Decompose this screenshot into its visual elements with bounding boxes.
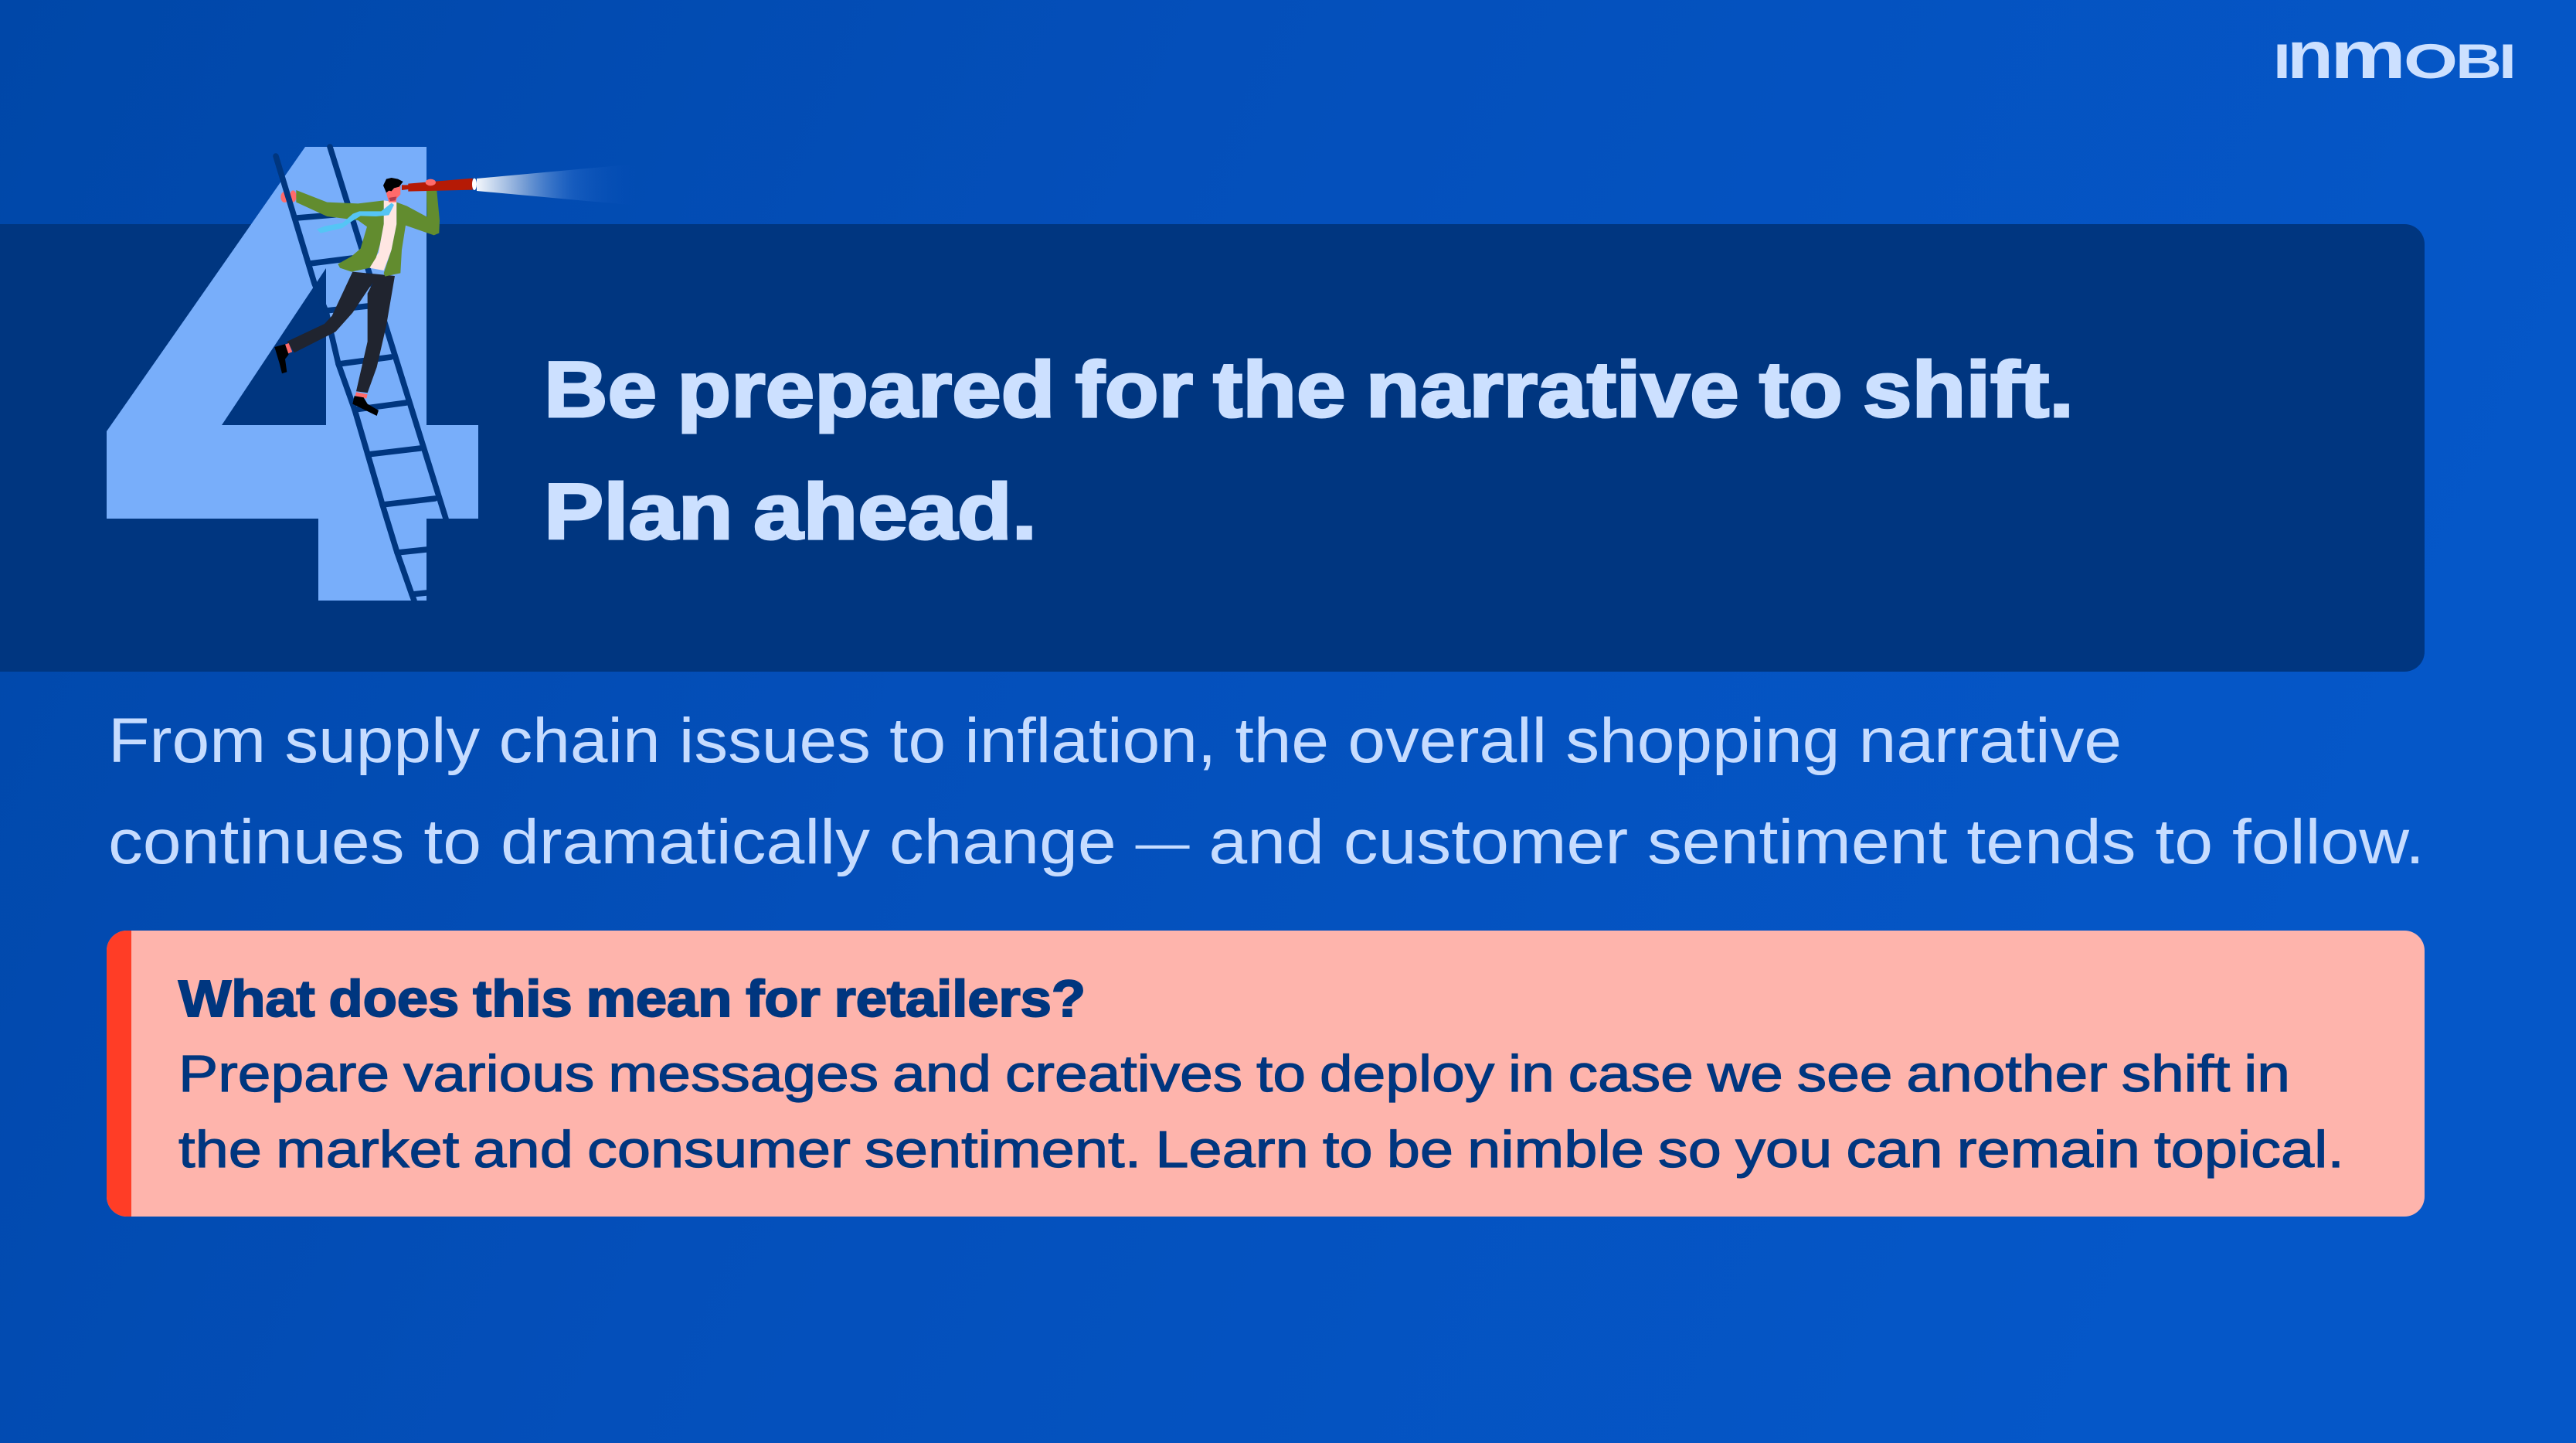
mouth (389, 196, 396, 201)
callout box (107, 931, 2425, 1217)
socks (284, 343, 368, 399)
callout heading: What does this mean for retailers? (178, 970, 1086, 1028)
telescope (402, 179, 473, 192)
shoes (274, 344, 379, 416)
hand on telescope (426, 179, 436, 185)
jacket (296, 190, 440, 277)
telescope lens (472, 179, 477, 190)
shirt (369, 200, 396, 271)
logo: InMobi: O (2404, 35, 2458, 89)
body text: From supply chain issues to inflation, the overall shopping narrative (108, 706, 2122, 776)
body text: — (1136, 815, 1190, 870)
hair (383, 178, 403, 192)
ladder (276, 147, 446, 601)
logo: InMobi: B (2455, 35, 2502, 89)
logo: InMobi: m (2330, 18, 2406, 93)
illustration: number 4 with ladder and man with telescope (107, 147, 637, 601)
number 4 (107, 147, 478, 601)
trousers (287, 272, 395, 393)
man with telescope (274, 178, 477, 416)
logo: InMobi: n (2287, 18, 2333, 93)
body text: and customer sentiment tends to follow. (1190, 807, 2425, 877)
icon: left hand (280, 190, 297, 202)
heading: Plan ahead. (544, 468, 1037, 556)
heading: Be prepared for the narrative to shift. (544, 345, 2074, 434)
logo: InMobi: I (2499, 35, 2517, 89)
callout text: Prepare various messages and creatives to deploy in case we see another shift in (178, 1045, 2290, 1103)
callout accent bar (107, 931, 131, 1217)
callout text (178, 1045, 2344, 1179)
tie (317, 203, 394, 233)
body text: continues to dramatically change (108, 807, 1031, 877)
callout: what this means for retailers (107, 931, 2425, 1217)
panel: headline band (0, 224, 2425, 672)
telescope beam (477, 164, 637, 206)
logo: InMobi: I (2273, 35, 2291, 89)
heading (544, 345, 2074, 556)
logo: InMobi (2273, 18, 2517, 93)
callout text: the market and consumer sentiment. Learn to be nimble so you can remain topical. (178, 1121, 2344, 1179)
neck and face (386, 185, 400, 202)
body text (108, 706, 2425, 877)
